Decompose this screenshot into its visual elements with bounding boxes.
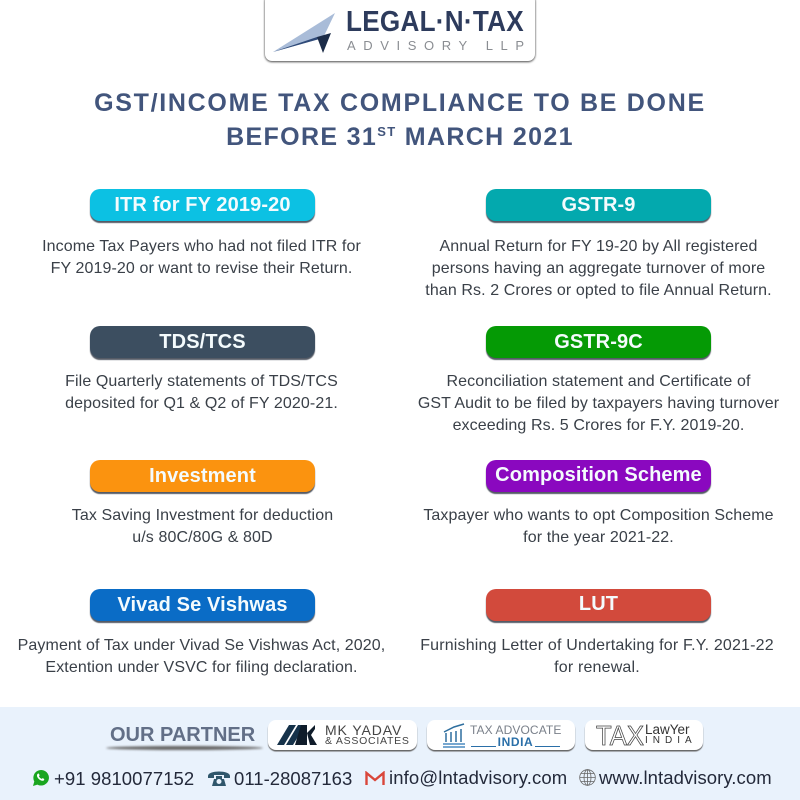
India text: INDIA (498, 735, 533, 749)
text: Investment (72, 507, 333, 546)
Tax Advocate text: TAX ADVOCATE (470, 723, 561, 737)
MK mark (277, 725, 317, 745)
heading: Investment: Investment (149, 465, 256, 487)
text: Composition Scheme: Taxpayer who wants to opt Composition Scheme (423, 507, 774, 524)
logo wordmark: LEGAL·N·TAX (346, 6, 524, 38)
partner logo: MK Yadav (268, 720, 417, 750)
text: GSTR-9C: exceeding Rs. 5 Crores for F.Y. 2019-20. (453, 417, 744, 434)
text: ITR: FY 2019-20 or want to revise their Return. (51, 260, 352, 277)
heading: Composition Scheme: Composition Scheme (495, 464, 702, 486)
text: Investment: Tax Saving Investment for deduction (72, 507, 333, 524)
heading: GSTR-9: GSTR-9 (561, 194, 636, 216)
heading: ITR (90, 189, 315, 221)
text: GSTR-9C: Reconciliation statement and Certificate of (446, 373, 750, 390)
logo card (265, 0, 535, 61)
heading: GSTR-9C (486, 326, 711, 358)
heading: Investment (90, 460, 315, 492)
partner logo: Tax Lawyer India (585, 720, 703, 750)
icon: telephone (208, 772, 230, 786)
text: GSTR-9 (425, 238, 772, 299)
our partner heading: OUR PARTNER (110, 724, 255, 746)
email: info@lntadvisory.com (389, 767, 567, 788)
text: Composition Scheme (423, 507, 774, 546)
text: Vivad Se Vishwas: Extention under VSVC for filing declaration. (45, 659, 358, 676)
partner logo: Tax Advocate India (427, 720, 575, 750)
text: GSTR-9: persons having an aggregate turnover of more (432, 260, 765, 277)
text: TDS/TCS: File Quarterly statements of TDS/TCS (65, 373, 338, 390)
icon: gmail (365, 771, 385, 785)
heading: LUT: LUT (579, 593, 618, 615)
text: Vivad Se Vishwas: Payment of Tax under Vivad Se Vishwas Act, 2020, (18, 637, 385, 654)
title: BEFORE 31ST MARCH 2021 (226, 122, 574, 150)
text: GSTR-9C (418, 373, 779, 434)
footer band (0, 707, 800, 800)
heading: GSTR-9C: GSTR-9C (554, 331, 643, 353)
logo mark (273, 13, 335, 53)
title (94, 89, 706, 150)
text: LUT (420, 637, 774, 676)
text: ITR: Income Tax Payers who had not filed ITR for (42, 238, 361, 255)
icon: whatsapp (33, 770, 49, 786)
MK subtext: & ASSOCIATES (325, 735, 410, 747)
heading: Vivad Se Vishwas: Vivad Se Vishwas (117, 594, 288, 616)
heading: TDS/TCS (90, 326, 315, 358)
pillars icon (443, 723, 465, 748)
logo subtitle: ADVISORY LLP (347, 38, 532, 53)
text: GSTR-9: than Rs. 2 Crores or opted to file Annual Return. (425, 282, 772, 299)
LawYer text: LawYer (645, 722, 690, 737)
heading underline (106, 746, 263, 750)
phone number: mobile: +91 9810077152 (54, 768, 194, 789)
text: TDS/TCS (65, 373, 338, 412)
text: LUT: for renewal. (554, 659, 640, 676)
text: Composition Scheme: for the year 2021-22. (523, 529, 674, 546)
text: ITR (42, 238, 361, 277)
heading: ITR: ITR for FY 2019-20 (114, 194, 291, 216)
heading: TDS/TCS: TDS/TCS (159, 331, 246, 353)
icon: globe (579, 769, 596, 786)
title: GST/INCOME TAX COMPLIANCE TO BE DONE (94, 89, 706, 117)
text: TDS/TCS: deposited for Q1 & Q2 of FY 2020-21. (65, 395, 338, 412)
heading: GSTR-9 (486, 189, 711, 221)
phone number: landline: 011-28087163 (234, 768, 352, 789)
website: www.lntadvisory.com (599, 767, 772, 788)
heading: LUT (486, 589, 711, 621)
India text: INDIA (645, 735, 697, 746)
text: LUT: Furnishing Letter of Undertaking for F.Y. 2021-22 (420, 637, 774, 654)
text: Vivad Se Vishwas (18, 637, 385, 676)
text: GSTR-9: Annual Return for FY 19-20 by All registered (439, 238, 758, 255)
text: Investment: u/s 80C/80G & 80D (132, 529, 273, 546)
text: GSTR-9C: GST Audit to be filed by taxpayers having turnover (418, 395, 779, 412)
heading: Vivad Se Vishwas (90, 589, 315, 621)
MK text: MK YADAV (325, 722, 402, 738)
heading: Composition Scheme (486, 460, 711, 492)
